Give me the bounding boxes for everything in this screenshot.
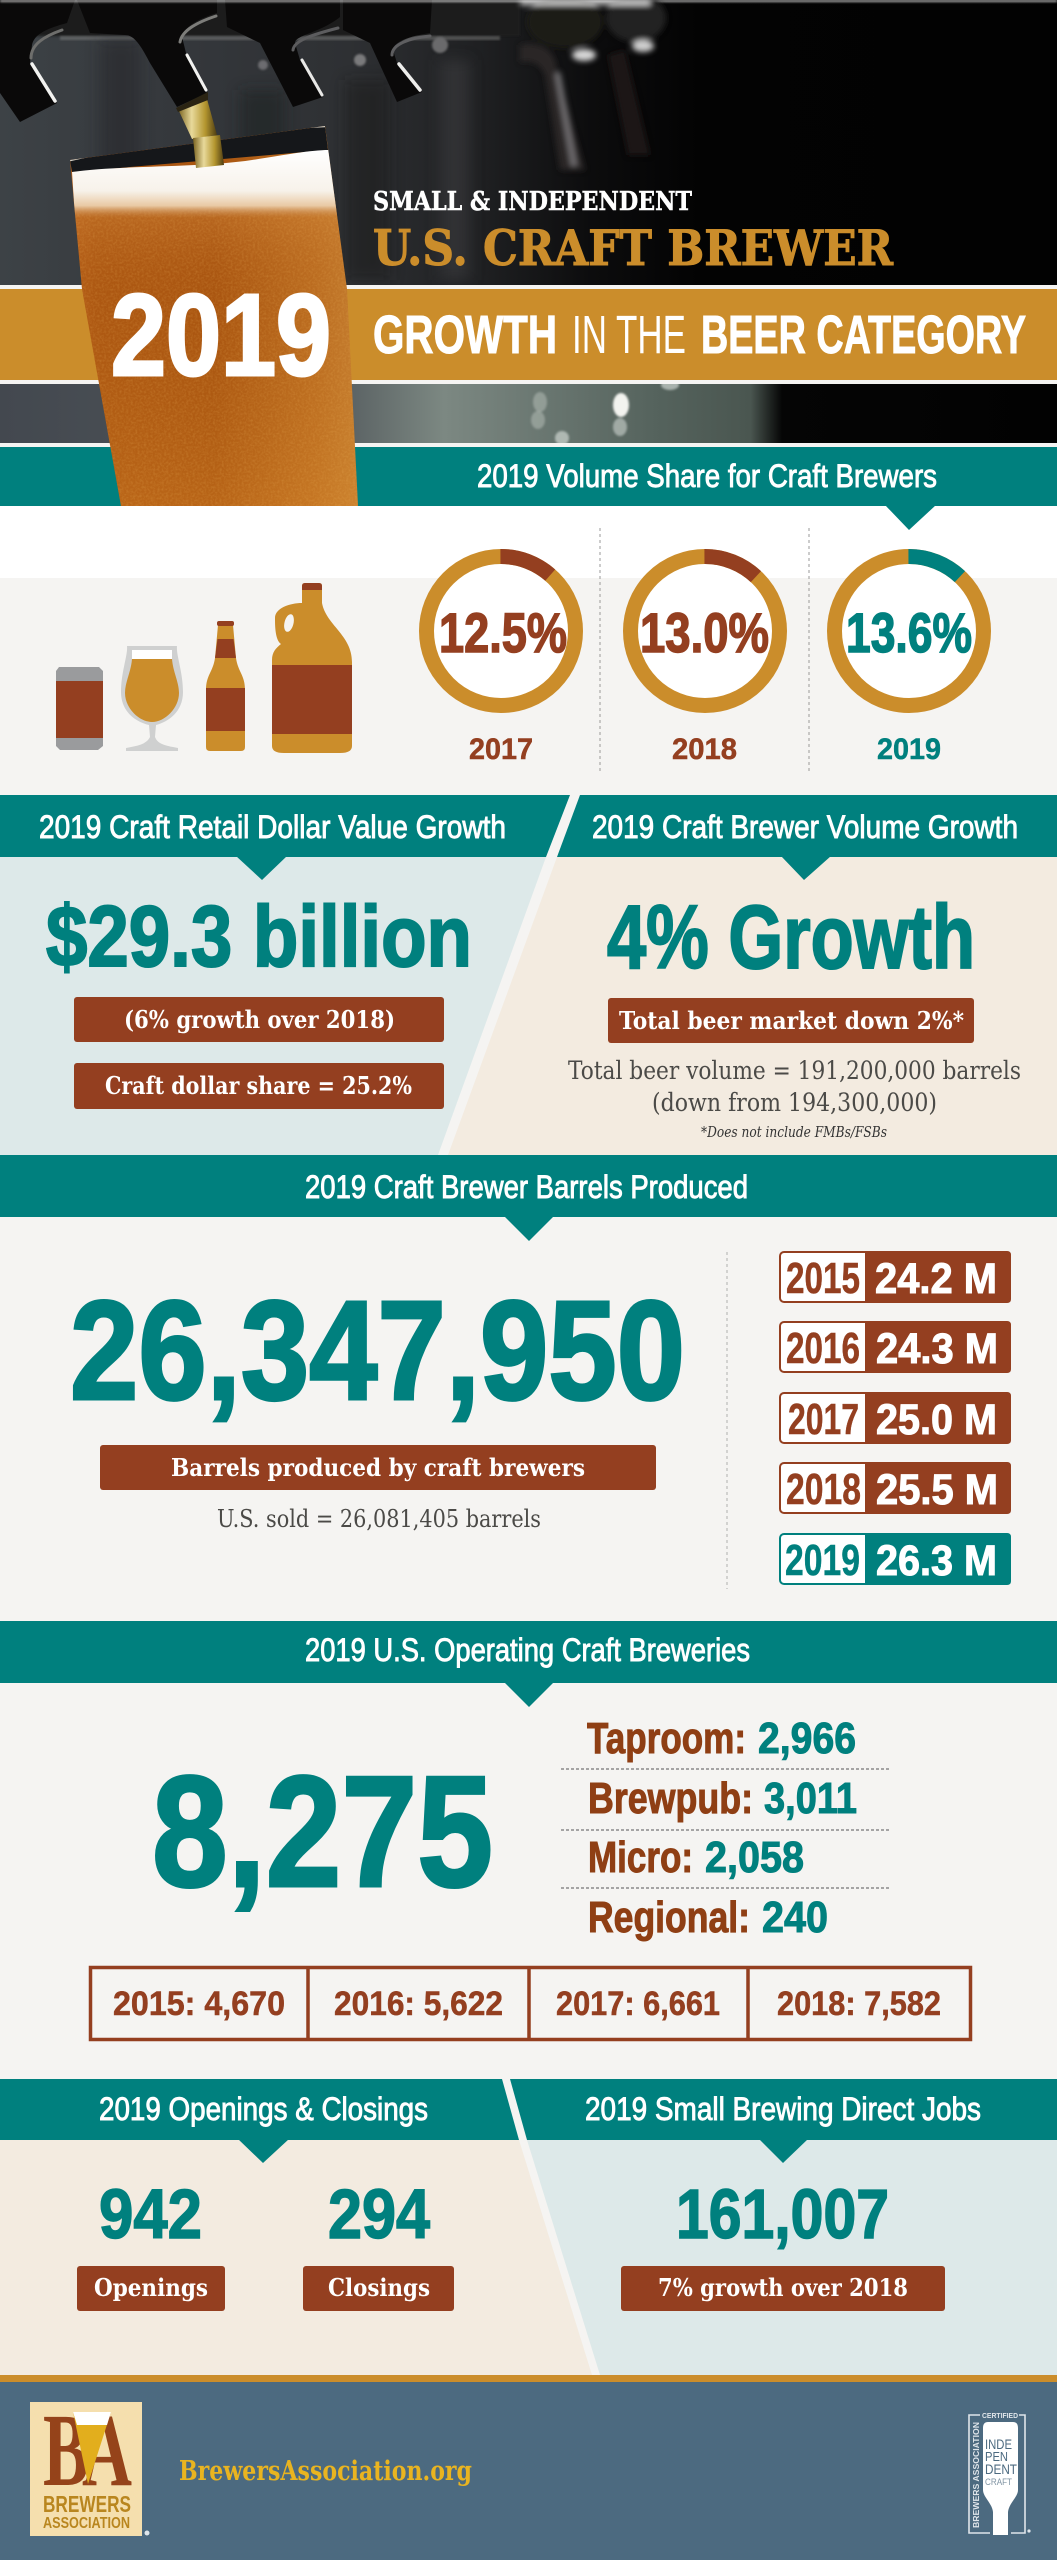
donut: 2018 share: [630, 556, 780, 706]
brewery type list: Regional:: [588, 1893, 750, 1942]
panel: craft retail dollar value growth: [0, 795, 570, 1155]
big value: 161,007: [676, 2175, 889, 2253]
brewery type list: 3,011: [764, 1774, 857, 1823]
logo: certified independent craft: CERTIFIED: [982, 2413, 1018, 2420]
chip: dollar share: [74, 1063, 444, 1109]
illustration: tap spout and beer stream: [176, 92, 224, 168]
heading: 2019 Openings & Closings: [99, 2091, 428, 2127]
brewery type list: [561, 1714, 890, 1942]
brewery type list: 2,966: [758, 1714, 856, 1763]
chip: dollar share: Craft dollar share = 25.2%: [105, 1071, 412, 1100]
year labels: [469, 733, 941, 766]
year pill: 2015: [780, 1251, 1011, 1303]
year labels: 2019: [877, 733, 941, 766]
panel: volume share: [0, 505, 1057, 795]
title line: U.S. craft brewer: U.S. CRAFT BREWER: [373, 219, 894, 277]
logo: certified independent craft: DENT: [985, 2461, 1017, 2477]
value: openings: 942: [99, 2175, 202, 2253]
chip: market down: Total beer market down 2%*: [619, 1006, 964, 1035]
brewery type list: 2,058: [705, 1833, 804, 1882]
donut: 2017 share: 12.5%: [439, 601, 567, 664]
chip: growth: (6% growth over 2018): [124, 1005, 395, 1034]
chip: growth: 7% growth over 2018: [658, 2273, 908, 2302]
brewery type list: Brewpub:: [588, 1774, 753, 1823]
donut: 2018 share: 13.0%: [640, 601, 769, 664]
title year: 2019: 2019: [111, 270, 331, 400]
chip: growth: [74, 997, 444, 1042]
year pill: 2019: 2019: [785, 1536, 860, 1585]
title line: growth in the beer category: [373, 305, 1026, 365]
logo: certified independent craft: BREWERS ASSOCIATION: [972, 2422, 981, 2528]
brewery type list: Taproom:: [587, 1714, 746, 1763]
website link text: BrewersAssociation.org: [179, 2456, 472, 2487]
illustration: pint glass of beer: [60, 120, 370, 510]
year pill: 2017: 25.0 M: [876, 1396, 997, 1444]
logo: Brewers Association: BREWERS: [43, 2491, 131, 2517]
title line: growth in the beer category: GROWTH: [373, 305, 557, 365]
history table: 2018: 7,582: [777, 1985, 941, 2023]
year labels: 2018: [672, 733, 737, 766]
donut: 2019 share: [834, 556, 984, 706]
logo: Brewers Association: B: [43, 2393, 89, 2508]
year pill: 2018: [780, 1462, 1011, 1514]
logo: Brewers Association: A: [82, 2393, 132, 2508]
heading band: 2019 volume share: [0, 447, 1057, 506]
logo: Brewers Association: [30, 2393, 150, 2536]
chip: growth: [621, 2266, 945, 2311]
panel: craft brewer volume growth: [448, 795, 1057, 1155]
chip: barrels produced: Barrels produced by craft brewers: [171, 1453, 585, 1482]
logo: Brewers Association: ASSOCIATION: [43, 2515, 130, 2532]
year pill: 2017: [780, 1392, 1011, 1444]
year pill: 2015: 2015: [786, 1254, 860, 1303]
logo: certified independent craft: CRAFT: [985, 2477, 1012, 2487]
heading: volume share: 2019 Volume Share for Craft Brewers: [477, 458, 937, 494]
title: [111, 187, 1026, 400]
donut: 2019 share: 13.6%: [846, 601, 972, 664]
chip: market down: [608, 998, 974, 1043]
footer: [0, 2375, 1057, 2560]
brewery type list: Micro:: [588, 1833, 693, 1882]
chip: closings: Closings: [328, 2273, 430, 2302]
panel: openings and closings: [0, 2079, 592, 2375]
year pill: 2018: 2018: [786, 1465, 861, 1514]
logo: certified independent craft: PEN: [985, 2449, 1008, 2464]
chip: barrels produced: [100, 1445, 656, 1490]
year pill: 2016: 24.3 M: [876, 1325, 998, 1373]
icon: bottle: [206, 621, 245, 751]
heading: 2019 Small Brewing Direct Jobs: [585, 2091, 981, 2127]
big value: $29.3 billion: [46, 889, 472, 985]
title line: growth in the beer category: IN THE: [572, 305, 686, 365]
US sold text: U.S. sold = 26,081,405 barrels: [217, 1505, 541, 1533]
history table: [90, 1966, 970, 2041]
heading: 2019 Craft Brewer Barrels Produced: [305, 1169, 748, 1205]
year pill: 2017: 2017: [788, 1395, 859, 1444]
brewery type list: 240: [762, 1893, 828, 1942]
heading: 2019 Craft Retail Dollar Value Growth: [39, 809, 506, 845]
big value: 8,275: [152, 1744, 493, 1920]
panel: barrels produced: [0, 1155, 1057, 1589]
logo: certified independent craft: INDE: [985, 2436, 1012, 2452]
year pill: 2019: 26.3 M: [876, 1537, 997, 1585]
year pill: 2016: 2016: [786, 1324, 860, 1373]
year labels: 2017: [469, 733, 533, 766]
year pill: 2015: 24.2 M: [875, 1255, 997, 1303]
history table: 2016: 5,622: [334, 1985, 503, 2023]
heading: 2019 U.S. Operating Craft Breweries: [305, 1632, 750, 1668]
panel: direct jobs: [510, 2079, 1057, 2375]
icon: growler: [272, 583, 352, 753]
panel: operating breweries: [0, 1621, 1057, 2041]
chip: openings: Openings: [94, 2273, 208, 2302]
icon: can: [56, 667, 103, 750]
history table: 2017: 6,661: [556, 1985, 720, 2023]
value: closings: 294: [328, 2175, 430, 2253]
year pill: 2018: 25.5 M: [876, 1466, 998, 1514]
footnote: *Does not include FMBs/FSBs: [701, 1123, 887, 1141]
total volume text: (down from 194,300,000): [652, 1088, 937, 1117]
band: white rules and gold title band: [0, 285, 1057, 447]
big value: 26,347,950: [70, 1271, 685, 1429]
hero photo: beer taps and glass: [0, 0, 1057, 445]
year pill: 2019: [780, 1533, 1011, 1585]
chip: closings: [303, 2266, 454, 2311]
year pill: 2016: [780, 1321, 1011, 1373]
logo: certified independent craft: [969, 2413, 1031, 2535]
chip: openings: [77, 2266, 225, 2311]
total volume text: [568, 1056, 1021, 1117]
title line: small and independent: SMALL & INDEPENDENT: [373, 187, 693, 217]
donut: 2017 share: [426, 556, 576, 706]
icon: tulip glass: [121, 646, 183, 751]
history table: 2015: 4,670: [113, 1985, 285, 2023]
